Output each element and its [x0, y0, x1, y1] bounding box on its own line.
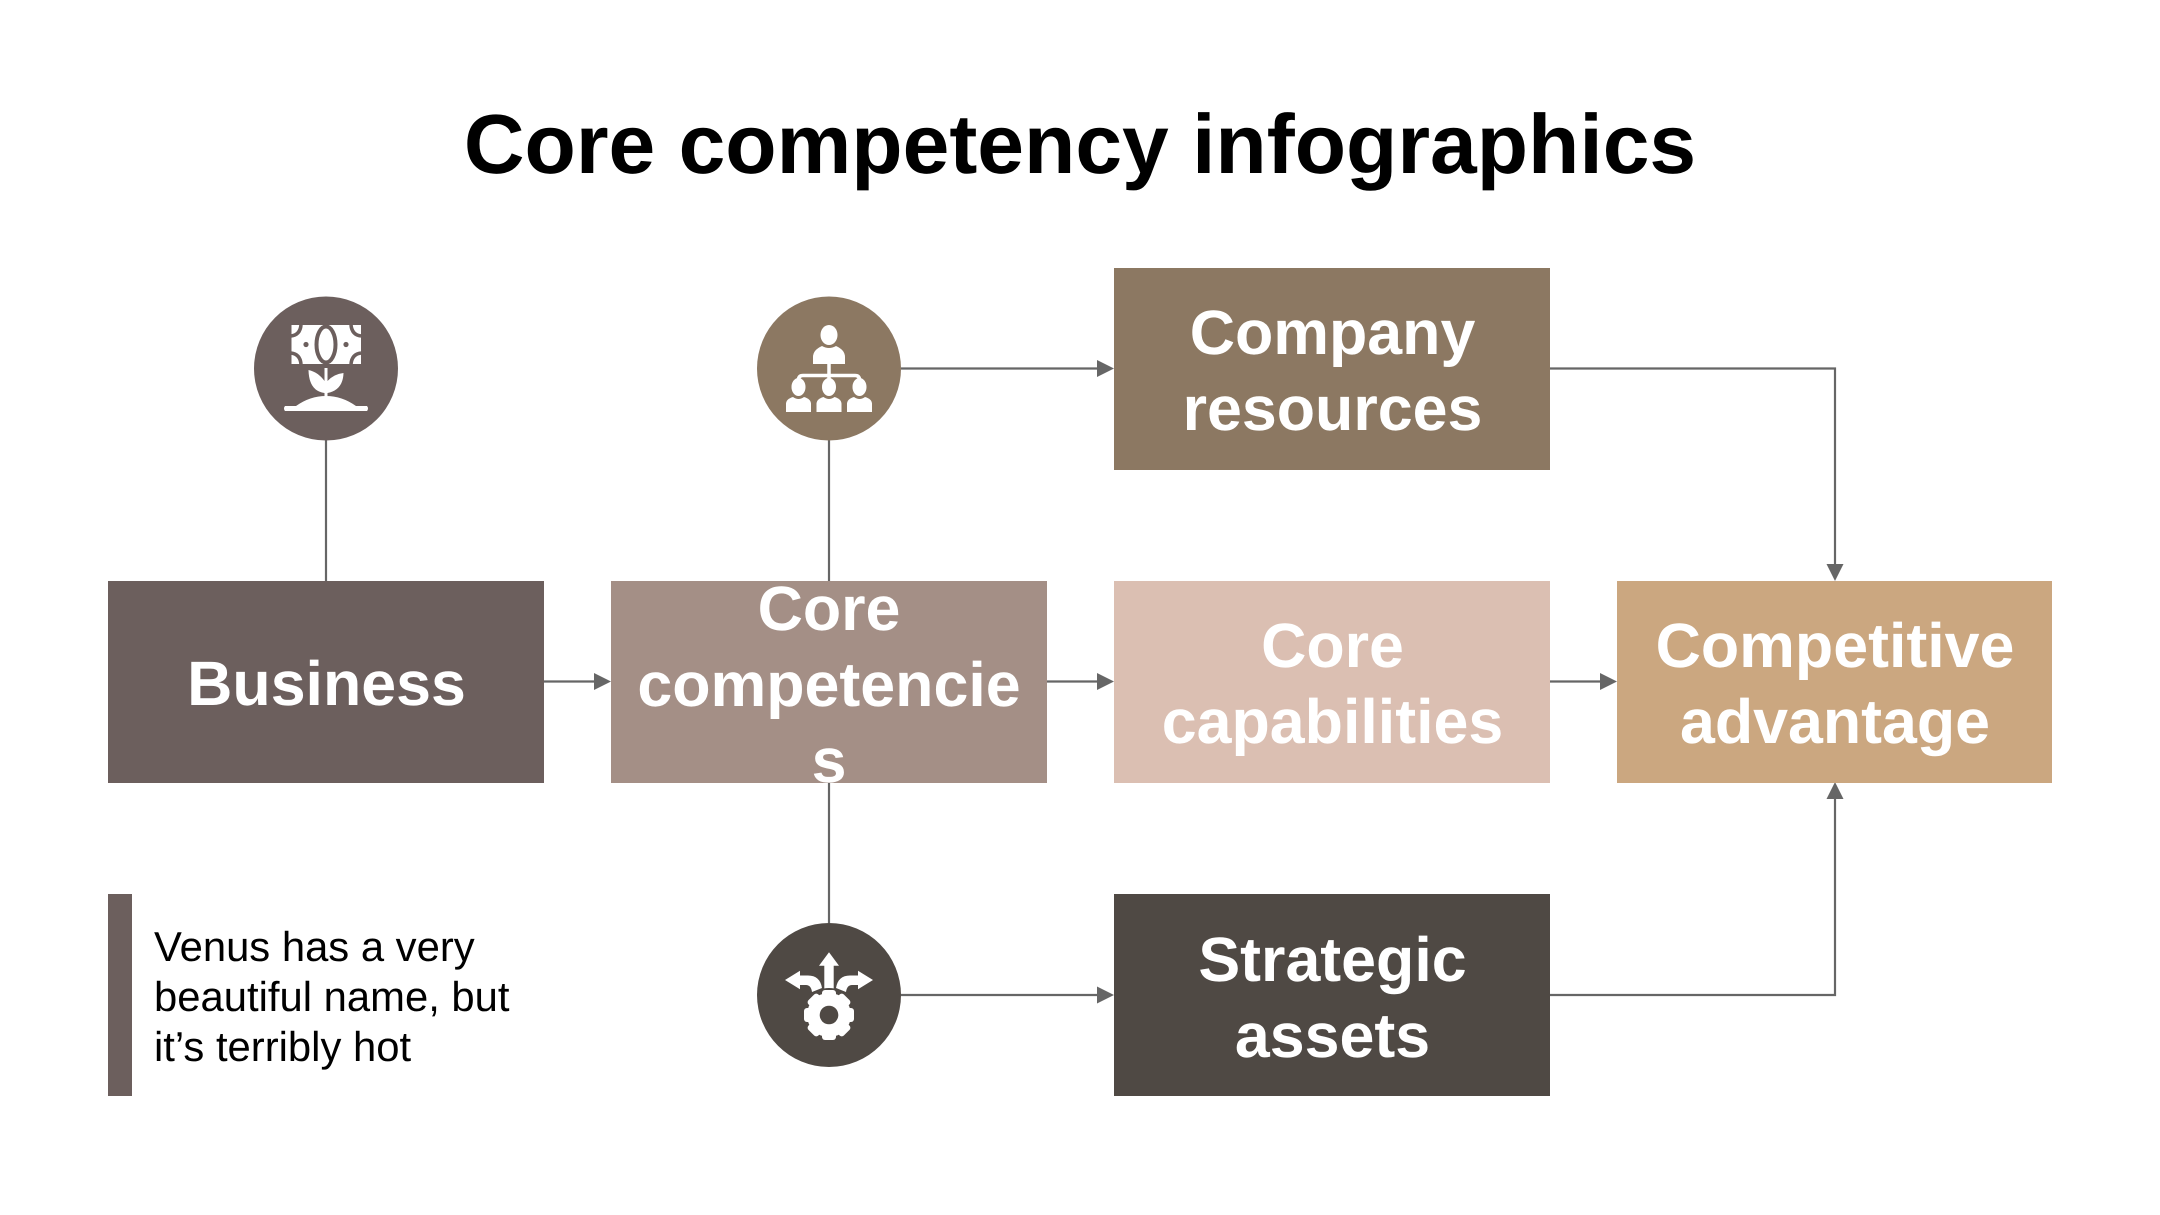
box: competitive advantage: Competitive	[1656, 611, 2014, 681]
box: company resources: resources	[1183, 374, 1482, 444]
box: strategic assets: Strategic	[1198, 925, 1467, 995]
arrow: business to core competencies	[544, 673, 611, 690]
box: business	[108, 581, 544, 783]
box: core competencies	[611, 574, 1047, 796]
callout text: Venus has a very	[154, 923, 475, 970]
callout text: beautiful name, but	[154, 973, 510, 1020]
connector: business icon to business box	[325, 440, 327, 581]
connector: hierarchy icon to core competencies box	[828, 440, 830, 581]
box: competitive advantage: advantage	[1680, 687, 1990, 757]
connector: core competencies box to strategy icon	[828, 782, 830, 923]
callout text: it’s terribly hot	[154, 1023, 411, 1070]
box: core capabilities: capabilities	[1162, 687, 1503, 757]
arrow: strategic assets to competitive advantage	[1550, 782, 1844, 995]
arrow: core competencies to core capabilities	[1047, 673, 1114, 690]
box: company resources: Company	[1190, 298, 1475, 368]
arrow: strategy icon to strategic assets	[901, 986, 1114, 1004]
arrow: company resources to competitive advantage	[1550, 368, 1844, 581]
arrow: core capabilities to competitive advantage	[1550, 673, 1617, 690]
box: core capabilities: Core	[1261, 611, 1404, 681]
box: business: Business	[187, 649, 466, 719]
callout: venus note	[108, 894, 510, 1096]
box: strategic assets: assets	[1235, 1001, 1430, 1071]
icon: organisation hierarchy	[757, 296, 901, 440]
arrow: hierarchy icon to company resources	[901, 360, 1114, 377]
icon: strategy gear with arrows	[757, 923, 901, 1067]
box: strategic assets	[1114, 894, 1550, 1096]
box: competitive advantage	[1617, 581, 2052, 783]
box: core competencies: competencie	[637, 650, 1021, 720]
box: company resources	[1114, 268, 1550, 470]
icon: money plant	[254, 296, 398, 440]
box: core competencies: s	[812, 726, 846, 796]
callout accent bar	[108, 894, 132, 1096]
callout text	[154, 923, 510, 1070]
box: core capabilities	[1114, 581, 1550, 783]
box: core competencies: Core	[758, 574, 900, 644]
title: Core competency infographics	[464, 97, 1696, 191]
